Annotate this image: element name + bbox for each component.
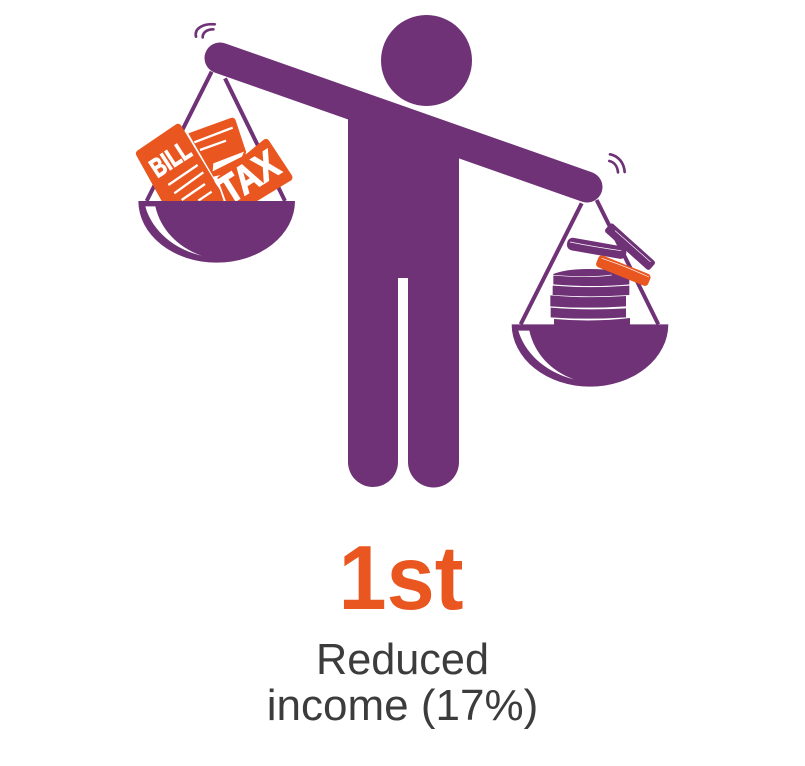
tax document: TAX — [211, 142, 288, 213]
infographic — [136, 15, 668, 729]
arm beam — [220, 58, 587, 187]
caption — [267, 635, 538, 730]
documents — [136, 118, 292, 201]
bowl — [512, 324, 668, 387]
left scale with bills — [136, 24, 295, 263]
bill document: BILL — [144, 135, 197, 183]
orange coin — [595, 254, 652, 287]
caption: Reduced — [316, 635, 489, 684]
scale strings — [147, 72, 285, 201]
coin stack — [550, 269, 630, 325]
wobble marks — [196, 24, 215, 37]
falling coin tilted — [604, 222, 656, 271]
body and legs — [348, 118, 459, 488]
rank heading: 1st — [338, 528, 464, 629]
head — [381, 15, 472, 106]
caption: income (17%) — [267, 681, 538, 730]
bowl highlight — [145, 206, 202, 256]
bowl — [138, 201, 295, 263]
wobble marks — [609, 154, 625, 172]
bill document — [136, 124, 224, 201]
figure: person balancing on arms — [220, 15, 587, 488]
right scale with coins — [512, 154, 668, 387]
bowl highlight — [518, 331, 574, 379]
middle bill card — [188, 118, 246, 177]
scale strings — [521, 200, 658, 324]
falling coin flat — [566, 237, 627, 260]
